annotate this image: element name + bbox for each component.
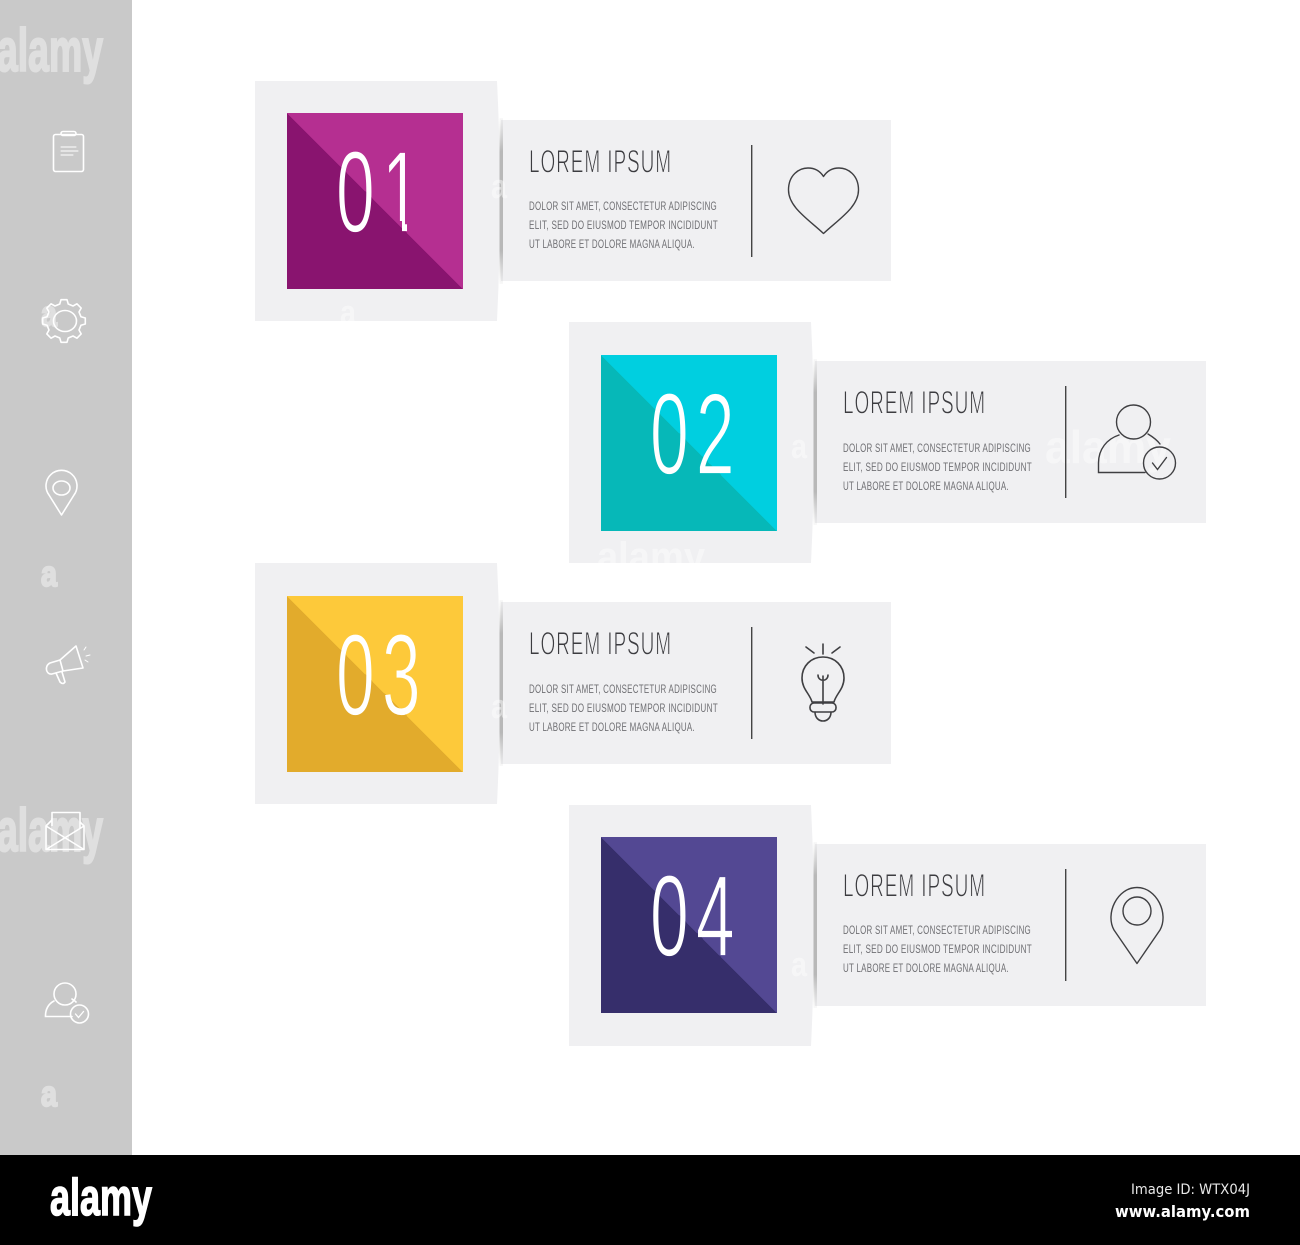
watermark letter: a (41, 553, 58, 594)
body text: DOLOR SIT AMET, CONSECTETUR ADIPISCING (529, 199, 717, 213)
number: 04 (650, 852, 742, 981)
body text: UT LABORE ET DOLORE MAGNA ALIQUA. (843, 479, 1009, 493)
card shadow (814, 842, 817, 1008)
panel: step 03 (255, 563, 891, 804)
watermark letter: a (791, 946, 808, 984)
watermark lower: alamy (0, 797, 103, 864)
icon: clipboard (54, 132, 84, 172)
watermark letter: a (491, 688, 508, 726)
body text: ELIT, SED DO EIUSMOD TEMPOR INCIDIDUNT (843, 460, 1032, 474)
number: 01 (336, 128, 428, 257)
watermark word: alamy (1045, 421, 1171, 473)
card shadow (500, 600, 503, 766)
colour square (287, 113, 463, 289)
heading: LOREM IPSUM (843, 384, 986, 420)
icon: heart (788, 168, 858, 234)
bar mask left (380, 221, 402, 237)
number: 03 (336, 611, 428, 740)
body text: DOLOR SIT AMET, CONSECTETUR ADIPISCING (843, 923, 1031, 937)
body text (843, 923, 1032, 975)
bar mask right (407, 221, 430, 237)
outer card (255, 563, 500, 804)
panel: step 01 (255, 81, 891, 332)
icon: gear (43, 300, 85, 342)
icon: open envelope (46, 812, 84, 850)
divider (751, 145, 752, 257)
watermark top: alamy (0, 17, 103, 84)
divider (751, 627, 752, 739)
icon: light bulb (802, 644, 844, 721)
heading: LOREM IPSUM (843, 868, 986, 904)
body text: ELIT, SED DO EIUSMOD TEMPOR INCIDIDUNT (529, 701, 718, 715)
body text: UT LABORE ET DOLORE MAGNA ALIQUA. (843, 961, 1009, 975)
icon: location pin (1111, 888, 1163, 964)
watermark letter: a (791, 428, 808, 466)
icon: location pin (46, 470, 77, 515)
text strip (815, 361, 1206, 523)
card shadow (814, 359, 817, 525)
colour square (287, 596, 463, 772)
text strip (501, 120, 891, 281)
body text (843, 441, 1032, 493)
body text: DOLOR SIT AMET, CONSECTETUR ADIPISCING (529, 682, 717, 696)
body text: ELIT, SED DO EIUSMOD TEMPOR INCIDIDUNT (529, 218, 718, 232)
divider (1065, 386, 1066, 498)
colour square (601, 837, 777, 1013)
number: 02 (650, 370, 742, 499)
outer card (569, 322, 814, 563)
footer logo: alamy (50, 1169, 152, 1227)
divider (1065, 869, 1066, 981)
watermark letter bottom: a (41, 1073, 58, 1114)
watermark word bottom: alamy (597, 535, 706, 579)
icon: megaphone (46, 646, 90, 684)
body text: UT LABORE ET DOLORE MAGNA ALIQUA. (529, 720, 695, 734)
heading: LOREM IPSUM (529, 626, 672, 662)
watermark letter gear: a (41, 293, 58, 334)
body text (529, 682, 718, 734)
icon: user check (46, 983, 88, 1023)
website: www.alamy.com (1115, 1202, 1250, 1221)
icon: user check (1098, 405, 1176, 479)
image id: Image ID: WTX04J (1131, 1182, 1250, 1198)
body text: ELIT, SED DO EIUSMOD TEMPOR INCIDIDUNT (843, 942, 1032, 956)
left sidebar (0, 0, 132, 1155)
heading: LOREM IPSUM (529, 144, 672, 180)
body text (529, 199, 718, 251)
colour square (601, 355, 777, 531)
panel: step 02 (569, 322, 1206, 579)
body text: UT LABORE ET DOLORE MAGNA ALIQUA. (529, 237, 695, 251)
outer card (569, 805, 814, 1046)
card shadow (500, 118, 503, 284)
text strip (815, 844, 1206, 1006)
footer bar (0, 1155, 1300, 1245)
watermark letter: a (491, 168, 508, 206)
outer card (255, 81, 500, 321)
text strip (501, 602, 891, 764)
watermark letter: a (340, 294, 357, 332)
body text: DOLOR SIT AMET, CONSECTETUR ADIPISCING (843, 441, 1031, 455)
panel: step 04 (569, 805, 1206, 1046)
